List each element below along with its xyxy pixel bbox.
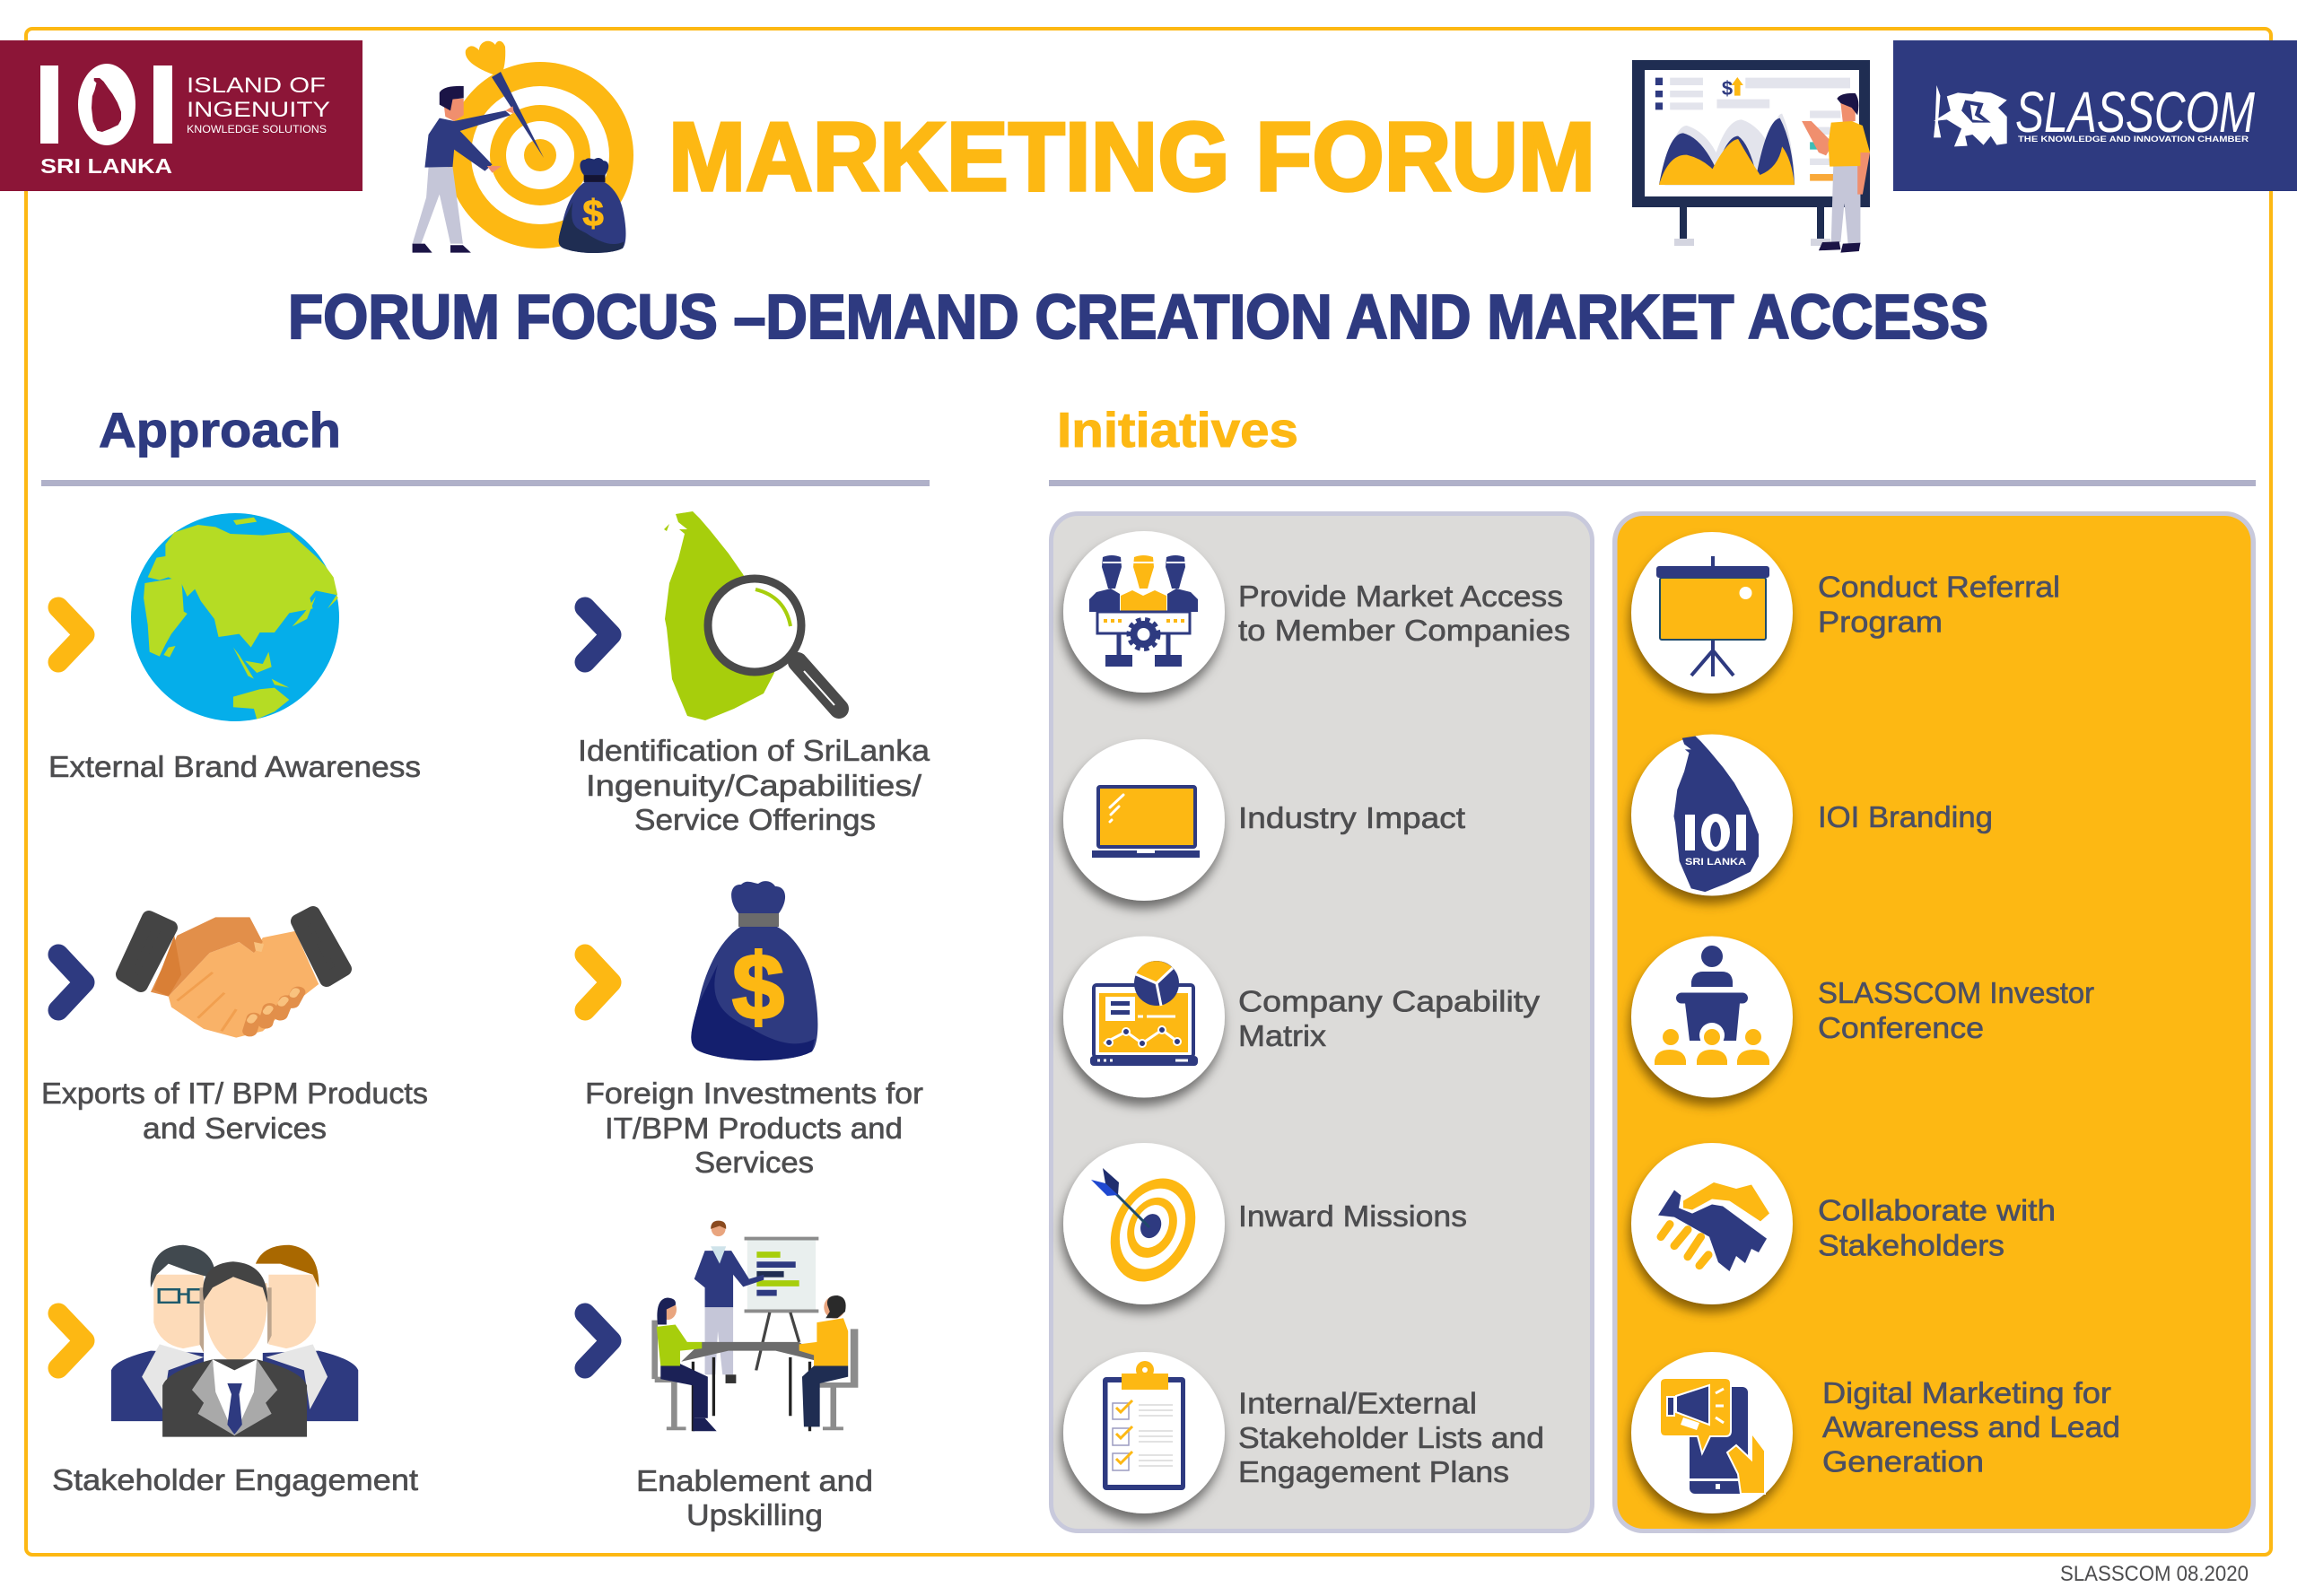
label: and Services	[143, 1112, 327, 1145]
label: Program	[1818, 605, 1943, 639]
label	[1238, 1387, 1544, 1488]
label: Internal/External	[1238, 1387, 1477, 1419]
icon: IOI Sri Lanka map	[1673, 737, 1759, 892]
panel: approach enablement	[585, 1221, 873, 1531]
icon: dashboard laptop	[1090, 961, 1198, 1066]
label: Stakeholders	[1818, 1229, 2004, 1261]
icon: money bag	[691, 881, 817, 1060]
icon: handshake	[123, 913, 345, 1038]
label: Collaborate with	[1818, 1193, 2056, 1227]
label: Inward Missions	[1238, 1199, 1467, 1233]
item: investor conference	[1631, 937, 2094, 1098]
label: Company Capability	[1238, 985, 1541, 1017]
item: stakeholder lists	[1063, 1352, 1544, 1513]
illustration: person with dartboard and money bag	[413, 41, 633, 253]
icon: speaker at podium	[1655, 946, 1769, 1065]
label	[41, 1077, 428, 1145]
panel: approach stakeholder engagement	[52, 1245, 418, 1496]
icon: phone with megaphone	[1660, 1378, 1765, 1494]
icon: laptop	[1092, 787, 1200, 858]
logo: IOI Sri Lanka: SRI LANKA	[40, 154, 172, 178]
label: Foreign Investments for	[585, 1077, 923, 1110]
label: Ingenuity/Capabilities/	[586, 769, 922, 802]
label	[1818, 1193, 2056, 1261]
label: Identification of SriLanka	[578, 734, 930, 767]
label	[1238, 580, 1570, 647]
logo: IOI Sri Lanka: KNOWLEDGE SOLUTIONS	[187, 125, 327, 135]
label: Matrix	[1238, 1019, 1327, 1052]
logo: IOI Sri Lanka	[0, 40, 362, 191]
icon: IOI Sri Lanka map: SRI LANKA	[1685, 857, 1746, 868]
label: to Member Companies	[1238, 614, 1570, 647]
label	[1818, 976, 2094, 1044]
label	[1822, 1376, 2120, 1478]
label: Services	[694, 1146, 814, 1179]
label	[636, 1464, 873, 1531]
title: MARKETING FORUM	[668, 102, 1595, 212]
panel: approach exports	[41, 913, 428, 1145]
icon: team and gear	[1089, 555, 1198, 667]
label: Industry Impact	[1238, 801, 1465, 834]
label: Stakeholder Engagement	[52, 1463, 418, 1496]
item: IOI branding	[1631, 734, 1993, 895]
panel: approach identification	[578, 511, 930, 836]
label: Generation	[1822, 1444, 1984, 1478]
label	[578, 734, 930, 836]
label: Stakeholder Lists and	[1238, 1421, 1544, 1454]
icon: target with arrow	[1091, 1164, 1211, 1295]
label	[1238, 985, 1541, 1052]
illustration: presenter with chart board	[1632, 60, 1870, 253]
label: External Brand Awareness	[48, 750, 421, 783]
item: market access	[1063, 531, 1570, 693]
arrow: yellow chevron	[58, 1313, 84, 1368]
icon: projector screen	[1656, 556, 1769, 676]
illustration: person with dartboard and money bag: $	[582, 192, 604, 234]
label: Conduct Referral	[1818, 571, 2060, 603]
item: collaborate	[1631, 1143, 2056, 1304]
label: IOI Branding	[1818, 800, 1993, 833]
panel: initiatives yellow column	[1612, 511, 2256, 1533]
icon: money bag: $	[732, 936, 784, 1040]
logo: IOI Sri Lanka: ISLAND OF	[187, 74, 326, 98]
logo: SLASSCOM: THE KNOWLEDGE AND INNOVATION CHAMBER	[2018, 135, 2249, 144]
logo: SLASSCOM	[1893, 40, 2297, 191]
label: Engagement Plans	[1238, 1455, 1509, 1488]
item: inward missions	[1063, 1143, 1467, 1304]
label: Service Offerings	[634, 803, 876, 836]
item: referral program	[1631, 532, 2060, 693]
heading: Initiatives: Initiatives	[1057, 402, 1298, 458]
illustration: presenter with chart board: $	[1722, 77, 1733, 100]
item: industry impact	[1063, 739, 1465, 901]
label: Digital Marketing for	[1822, 1376, 2111, 1409]
panel: approach external brand awareness	[48, 513, 421, 783]
icon: Sri Lanka with magnifier	[664, 511, 839, 720]
logo: IOI Sri Lanka: INGENUITY	[187, 98, 330, 122]
label	[1818, 571, 2060, 639]
heading: Approach: Approach	[99, 402, 341, 458]
label: Exports of IT/ BPM Products	[41, 1077, 428, 1110]
icon: handshake	[1658, 1182, 1769, 1271]
icon: globe	[131, 513, 339, 721]
arrow: navy chevron	[58, 955, 84, 1010]
arrow: yellow chevron	[58, 607, 84, 662]
icon: meeting scene	[651, 1221, 858, 1431]
arrow: yellow chevron	[585, 955, 611, 1010]
label	[585, 1077, 923, 1179]
label: Conference	[1818, 1011, 1984, 1044]
label: Provide Market Access	[1238, 580, 1563, 613]
label: Enablement and	[636, 1464, 873, 1497]
label: Upskilling	[686, 1498, 823, 1531]
label: SLASSCOM Investor	[1818, 976, 2094, 1009]
label: Awareness and Lead	[1822, 1410, 2120, 1443]
arrow: navy chevron	[585, 607, 611, 662]
panel: initiatives grey column	[1052, 513, 1592, 1531]
label: IT/BPM Products and	[605, 1112, 903, 1145]
footer note: SLASSCOM 08.2020	[2060, 1562, 2249, 1586]
item: capability matrix	[1063, 937, 1541, 1098]
subtitle: FORUM FOCUS –DEMAND CREATION AND MARKET ACCESS	[288, 282, 1988, 352]
panel: approach foreign investments	[585, 881, 923, 1179]
arrow: navy chevron	[585, 1313, 611, 1368]
icon: clipboard checklist	[1103, 1361, 1185, 1490]
icon: business people	[111, 1245, 358, 1437]
item: digital marketing	[1631, 1352, 2120, 1513]
